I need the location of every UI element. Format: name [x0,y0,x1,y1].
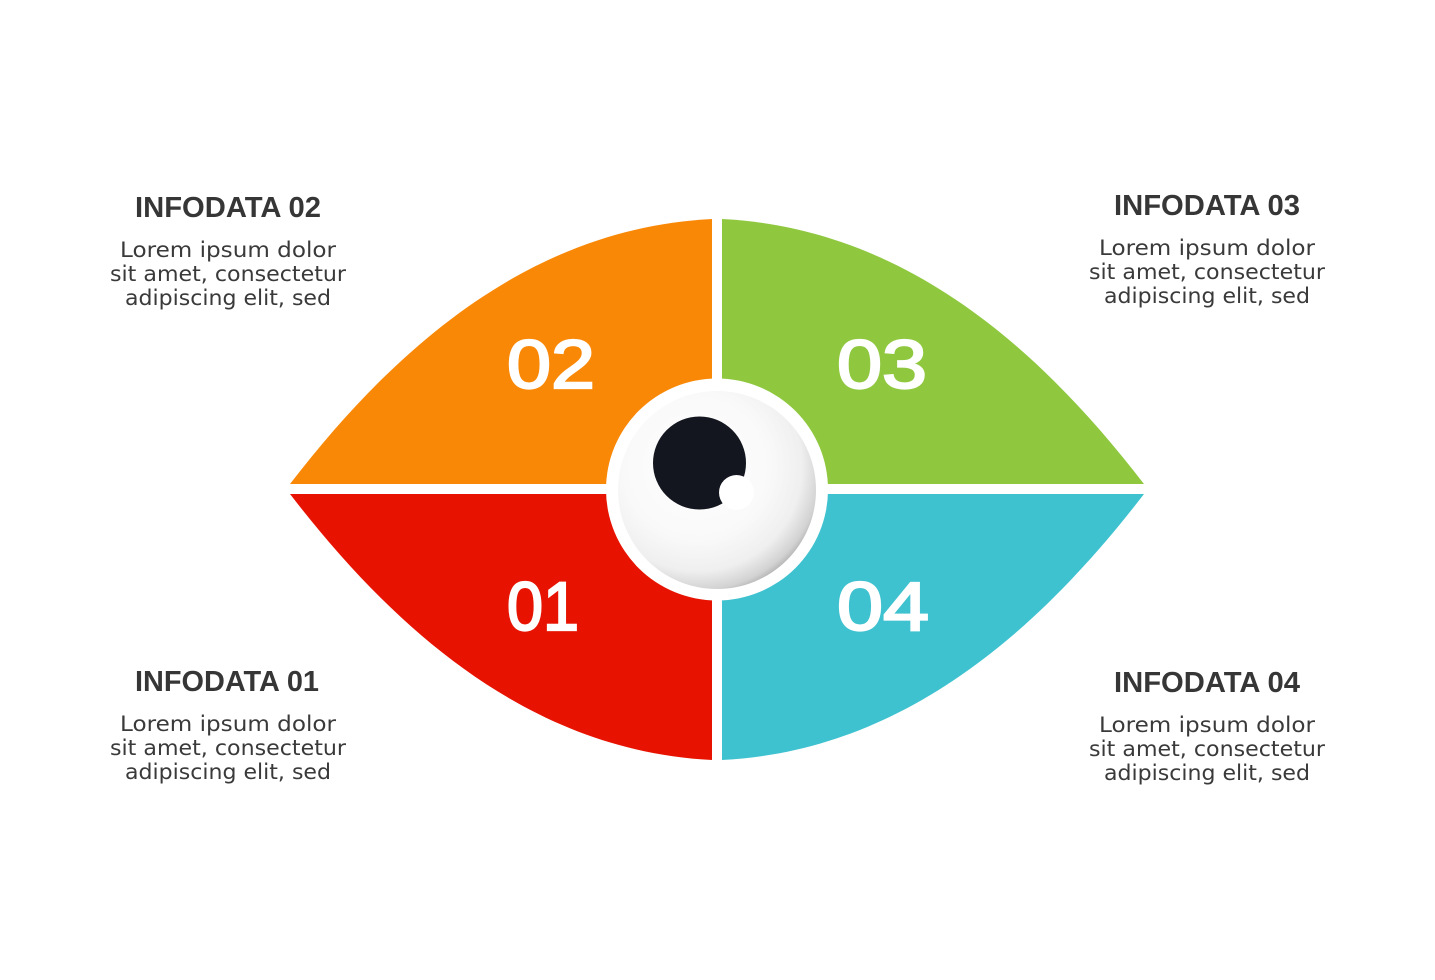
text block: infodata 02 [110,192,346,310]
number 04: 04 [837,568,929,645]
segment 03: green [722,219,1144,484]
text block: infodata 02: Lorem ipsum dolor [120,238,336,262]
text block: infodata 03: sit amet, consectetur [1089,260,1325,284]
text block: infodata 01: sit amet, consectetur [110,736,346,760]
text block: infodata 04: INFODATA 04 [1114,667,1300,699]
text block: infodata 04: adipiscing elit, sed [1104,761,1310,785]
text block: infodata 03 [1089,190,1325,308]
segment 04: teal [722,494,1144,760]
text block: infodata 01: Lorem ipsum dolor [120,712,336,736]
segment 02: orange [290,219,712,484]
text block: infodata 03: adipiscing elit, sed [1104,284,1310,308]
text block: infodata 01 [110,666,346,784]
number 03: 03 [837,326,927,403]
icon: eyeball [606,378,828,600]
number 01: 01 [507,568,579,645]
text block: infodata 04: sit amet, consectetur [1089,737,1325,761]
text block: infodata 01: adipiscing elit, sed [125,760,331,784]
text block: infodata 03: INFODATA 03 [1114,190,1300,222]
text block: infodata 02: INFODATA 02 [135,192,321,224]
segment 01: red [290,494,712,760]
text block: infodata 04: Lorem ipsum dolor [1099,713,1315,737]
text block: infodata 02: sit amet, consectetur [110,262,346,286]
number 02: 02 [507,326,595,403]
text block: infodata 03: Lorem ipsum dolor [1099,236,1315,260]
text block: infodata 01: INFODATA 01 [135,666,319,698]
text block: infodata 04 [1089,667,1325,785]
text block: infodata 02: adipiscing elit, sed [125,286,331,310]
